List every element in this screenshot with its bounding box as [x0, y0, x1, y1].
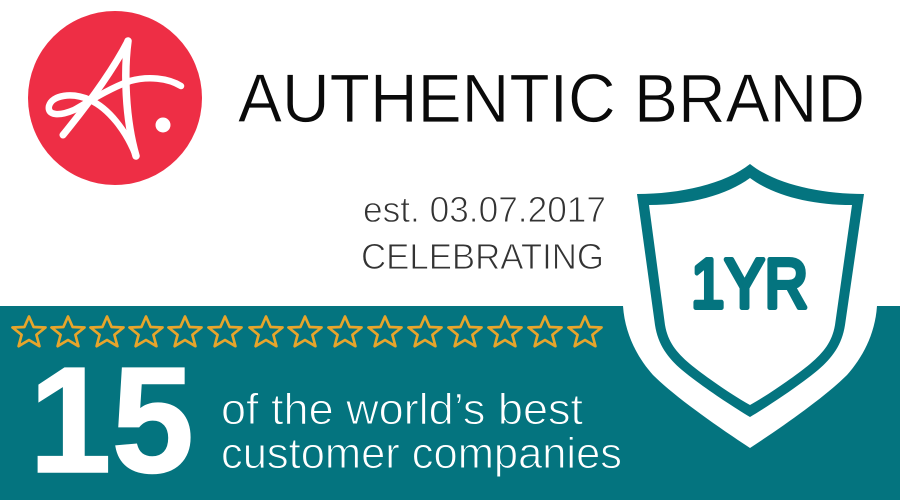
text: celebrating: CELEBRATING — [361, 236, 604, 277]
icon: white shield backing — [623, 306, 877, 448]
text: 1YR: 1YR — [691, 244, 808, 322]
icon: shield outline with 1YR badge — [637, 164, 864, 417]
rating: row of 15 stars — [12, 316, 602, 346]
heading: brand name: AUTHENTIC BRAND — [238, 60, 865, 137]
text: of the world's best: of the world’s best — [221, 385, 583, 434]
text: established date: est. 03.07.2017 — [363, 189, 606, 230]
panel: teal band — [0, 306, 900, 500]
big number: 15: 15 — [29, 335, 194, 500]
logo: red circle with A monogram — [28, 11, 202, 185]
text: customer companies: customer companies — [221, 429, 622, 478]
